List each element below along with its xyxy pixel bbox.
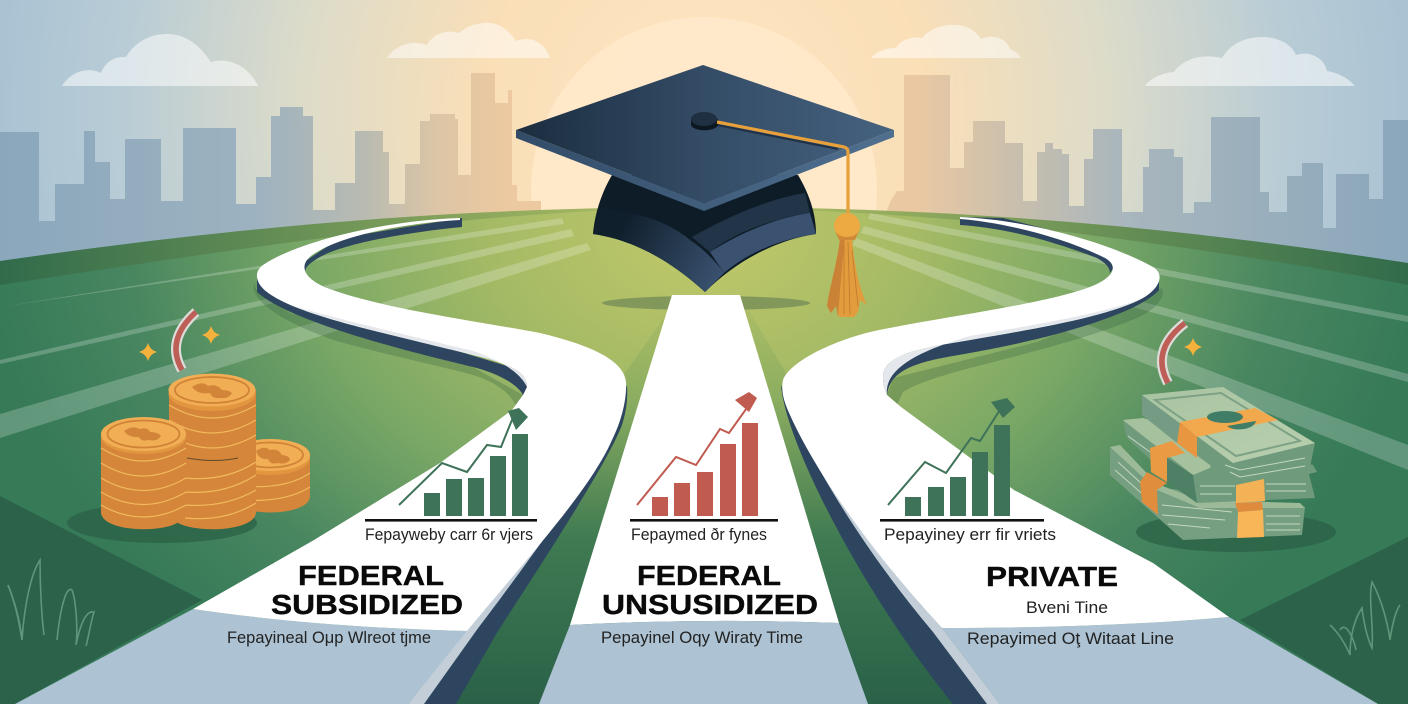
- money top stack: [1142, 387, 1315, 482]
- skyline: [0, 73, 1408, 300]
- money bottom stack: [1110, 445, 1305, 540]
- surface edge: [290, 305, 527, 387]
- money band holes: [1207, 411, 1243, 423]
- title: federal unsubsidized: FEDERAL: [637, 560, 781, 591]
- road: center: [539, 295, 868, 704]
- chart: unsubsidized: [630, 392, 778, 544]
- icon: sparkle left 1: [139, 343, 157, 361]
- coins: [67, 374, 310, 543]
- graduation cap: [516, 65, 894, 317]
- title: federal unsubsidized: [602, 560, 818, 620]
- cap board: [516, 130, 894, 211]
- trend line: [399, 415, 514, 505]
- coin shadow: [67, 503, 257, 543]
- money middle stack: [1123, 418, 1317, 503]
- bars: [905, 425, 1010, 516]
- note: subsidized: Fepayineal Oμp Wlreot tjme: [227, 628, 431, 647]
- blue foot: [15, 609, 467, 704]
- road: left: [15, 218, 627, 704]
- axis: [630, 519, 778, 522]
- note: private: Repayimed Oţ Witaat Line: [967, 629, 1174, 648]
- surface: [193, 218, 626, 631]
- axis: [365, 519, 537, 522]
- light rays: [0, 213, 1408, 470]
- tassel cord: [717, 122, 848, 215]
- chart caption: Fepaymed ðr fynes: [631, 525, 767, 544]
- lip: [408, 392, 625, 704]
- shadow under cap: [602, 296, 810, 310]
- trend line: [637, 405, 749, 505]
- money stacks: [1110, 387, 1336, 552]
- surface edge: [883, 298, 1143, 395]
- side: inner arm: [298, 218, 462, 273]
- arrow head: [991, 398, 1015, 418]
- money bands: [1140, 408, 1278, 538]
- coin stack middle: [168, 374, 256, 529]
- side: outer arm: [880, 277, 1159, 395]
- arrow head: [508, 408, 528, 430]
- blue foot: [942, 617, 1378, 704]
- side: long edge: [424, 385, 627, 704]
- subtitle: private: Bveni Tine: [1026, 598, 1108, 617]
- coin stack right: [230, 439, 310, 512]
- bars: [424, 434, 528, 516]
- side: inner arm: [960, 217, 1116, 273]
- lip: [783, 395, 1000, 704]
- icon: bent ribbon right: [1162, 323, 1185, 383]
- hill: [0, 207, 1408, 704]
- money shadow: [1136, 512, 1336, 552]
- sun: [531, 17, 877, 363]
- side: long edge: [781, 385, 987, 704]
- icon: sparkle right: [1184, 338, 1202, 356]
- field: [0, 208, 1408, 704]
- chart caption: Fepaywеby carr 6r vjers: [365, 525, 533, 544]
- title: federal subsidized: FEDERAL: [298, 560, 444, 591]
- chart: private: [880, 398, 1056, 544]
- chart: subsidized: [365, 408, 537, 544]
- road: right: [781, 217, 1378, 704]
- title: private: PRIVATE: [986, 561, 1118, 592]
- icon: sparkle left 2: [202, 326, 220, 344]
- cap band right: [692, 193, 810, 252]
- bottom dark corners: [0, 496, 202, 704]
- bars: [652, 423, 758, 516]
- tassel knot: [834, 213, 860, 239]
- icon: bent ribbon left: [176, 312, 196, 370]
- cap button: [691, 119, 718, 130]
- trend line: [888, 405, 1003, 505]
- gap fields between roads: [420, 295, 990, 704]
- title: federal unsubsidized: UNSUSIDIZED: [602, 589, 818, 620]
- icon: grass left: [8, 560, 94, 646]
- surface: [782, 217, 1229, 628]
- cap band left: [593, 208, 724, 292]
- coin stack left: [101, 417, 186, 529]
- note: unsubsidized: Pepayinel Oqy Wiraty Time: [601, 628, 803, 647]
- icon: grass right: [1330, 582, 1400, 655]
- title: federal subsidized: SUBSIDIZED: [271, 589, 463, 620]
- cap skull: [593, 175, 816, 292]
- side: outer arm: [257, 278, 530, 395]
- title: federal subsidized: [271, 560, 463, 620]
- tassel: [827, 238, 867, 317]
- axis: [880, 519, 1044, 522]
- road shadows: [254, 283, 523, 408]
- clouds: [62, 23, 1355, 86]
- cord shadow: [717, 125, 838, 149]
- chart caption: Pepayiney err fir vriets: [884, 525, 1056, 544]
- arrow head: [735, 392, 757, 412]
